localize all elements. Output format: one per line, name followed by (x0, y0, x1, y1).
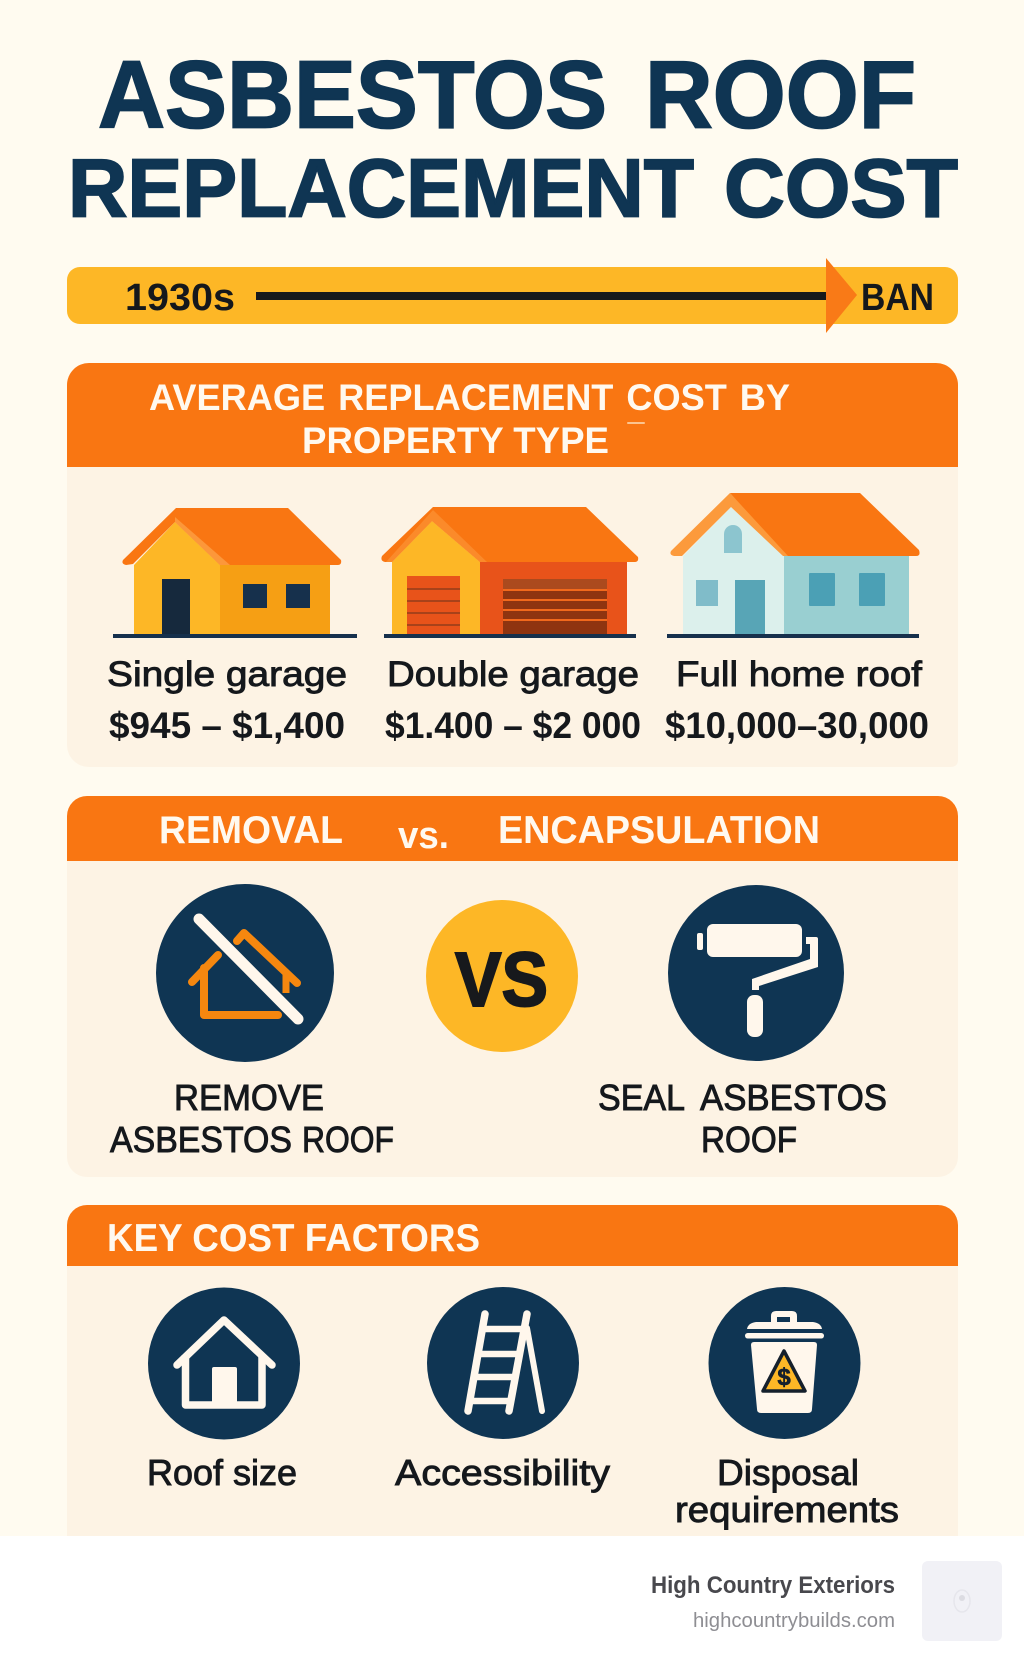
panel header: removal vs encapsulation: vs. (398, 815, 449, 857)
label: remove asbestos roof (110, 1077, 394, 1160)
label: seal asbestos roof: ASBESTOS (700, 1077, 887, 1118)
icon: remove roof (156, 884, 334, 1062)
timeline bar: 1930s to ban (67, 258, 958, 333)
panel header: average cost: PROPERTY TYPE (302, 419, 609, 461)
icon: double garage (381, 507, 638, 638)
panel header: key cost factors (67, 1205, 958, 1266)
panel: key cost factors (67, 1205, 958, 1536)
label: full home roof: Full home roof (676, 655, 922, 694)
title: ROOF (645, 42, 916, 148)
label: remove asbestos roof: ROOF (302, 1119, 394, 1160)
label: seal asbestos roof: ROOF (701, 1119, 797, 1160)
footer brand (651, 1561, 1002, 1641)
label: full home roof (665, 655, 929, 746)
label: remove asbestos roof: REMOVE (174, 1077, 324, 1118)
icon: VS badge (426, 900, 578, 1052)
label: double garage: $1.400 – $2 000 (385, 705, 641, 746)
icon: paint roller (668, 885, 844, 1061)
title (68, 42, 958, 234)
label: disposal requirements (675, 1452, 899, 1530)
label: disposal requirements: requirements (675, 1489, 899, 1530)
title: ASBESTOS (98, 42, 607, 148)
label: accessibility: Accessibility (395, 1452, 611, 1493)
label: single garage: $945 – $1,400 (109, 705, 345, 746)
label: remove asbestos roof: ASBESTOS (110, 1119, 292, 1160)
panel: average replacement cost by property type (67, 363, 958, 767)
panel header: key cost factors: KEY COST FACTORS (107, 1217, 480, 1260)
label: single garage (107, 655, 347, 746)
icon: VS badge: VS (455, 937, 548, 1023)
timeline bar: 1930s to ban: 1930s (125, 277, 235, 319)
label: double garage: Double garage (387, 655, 639, 694)
icon: single garage (113, 508, 357, 638)
label: disposal requirements: Disposal (717, 1452, 859, 1493)
timeline bar: 1930s to ban: BAN (861, 277, 934, 319)
label: full home roof: $10,000–30,000 (665, 705, 929, 746)
icon: ladder (427, 1287, 579, 1439)
icon: disposal bin: $ (777, 1364, 791, 1391)
label: roof size: Roof size (147, 1452, 297, 1493)
icon: full home (667, 493, 920, 638)
title: REPLACEMENT (68, 142, 694, 234)
footer brand: High Country Exteriors (651, 1572, 895, 1599)
panel: removal vs encapsulation (67, 796, 958, 1177)
label: seal asbestos roof: SEAL (598, 1077, 685, 1118)
icon: roof size house (148, 1288, 300, 1440)
label: double garage (385, 655, 641, 746)
icon: footer logo tile (922, 1561, 1002, 1641)
panel header: average cost: AVERAGE REPLACEMENT COST BY (149, 376, 790, 418)
panel header: average cost (67, 363, 958, 467)
label: single garage: Single garage (107, 655, 347, 694)
panel header: removal vs encapsulation: ENCAPSULATION (498, 809, 820, 852)
icon: disposal bin (708, 1287, 860, 1439)
footer brand: highcountrybuilds.com (693, 1610, 895, 1632)
title: COST (724, 142, 958, 234)
panel header: removal vs encapsulation: REMOVAL (159, 809, 343, 852)
label: seal asbestos roof (598, 1077, 887, 1160)
panel header: removal vs encapsulation (67, 796, 958, 861)
